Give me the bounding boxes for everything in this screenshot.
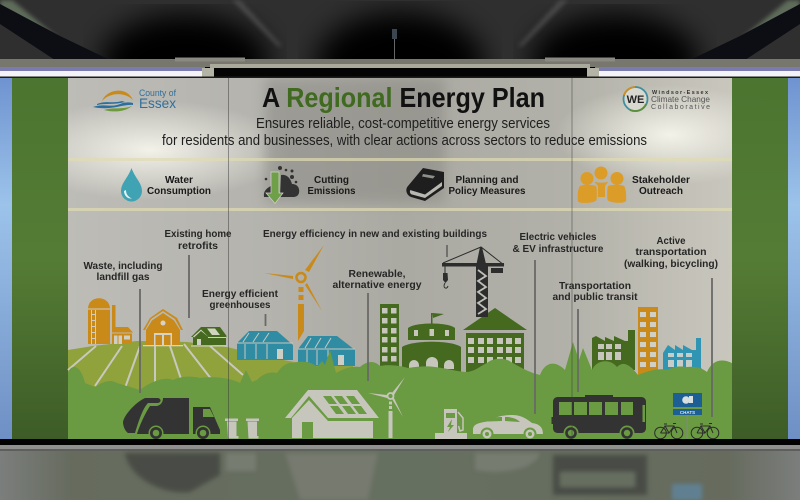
label: active transportation	[624, 235, 718, 270]
icon: silo and shed	[88, 298, 133, 344]
heading: cutting emissions	[308, 174, 356, 197]
icon: EV charging station	[435, 409, 467, 439]
label: waste: Waste, including	[84, 260, 162, 272]
label: existing home retrofits: retrofits	[178, 240, 218, 252]
logo: WE Climate Change Collaborative: Collaborative	[651, 104, 710, 111]
label: active transportation: Active	[656, 235, 686, 247]
heading: planning and policy measures: Planning and	[456, 174, 518, 186]
icon: barn	[143, 309, 183, 346]
icon: book	[406, 168, 444, 201]
floor with reflection	[0, 439, 800, 500]
icon: bins	[225, 418, 259, 438]
label: renewable energy: Renewable,	[348, 268, 406, 280]
title: A Regional Energy Plan	[262, 82, 545, 113]
subtitle: for residents and businesses, with clear actions across sectors to reduce emissions	[162, 132, 647, 149]
logo: WE Climate Change Collaborative: Windsor-Essex	[652, 90, 709, 96]
label: transportation and transit: Transportation	[559, 280, 631, 292]
heading: water consumption: Consumption	[147, 185, 211, 197]
icon: small solar house	[191, 327, 227, 346]
label: existing home retrofits: Existing home	[164, 228, 232, 240]
heading: cutting emissions: Emissions	[308, 185, 356, 197]
label: waste: landfill gas	[96, 271, 150, 283]
icon: teal factory	[663, 338, 705, 372]
heading: water consumption: Water	[165, 174, 193, 186]
heading: water consumption	[147, 174, 211, 197]
label: active transportation: (walking, bicycling)	[624, 258, 718, 270]
logo: County of Essex: County of	[139, 88, 176, 98]
heading: stakeholder outreach: Stakeholder	[632, 174, 690, 186]
icon: tall green building	[380, 304, 399, 368]
logo: WE Climate Change Collaborative	[624, 87, 710, 111]
logo: WE Climate Change Collaborative: WE	[627, 94, 644, 106]
icon: rotunda building	[402, 313, 461, 372]
icon: green factory	[592, 330, 635, 370]
icon: bus	[552, 395, 646, 440]
icon: garbage truck	[123, 398, 220, 440]
logo: County of Essex: Essex	[139, 95, 176, 111]
icon: bicycles	[655, 424, 719, 439]
label: energy efficient greenhouses: Energy efficient	[202, 288, 278, 300]
icon: solar house	[285, 390, 379, 438]
icon: CHATS sign	[673, 393, 702, 439]
label: energy efficient greenhouses	[202, 288, 278, 311]
icon: small wind turbine	[368, 377, 405, 438]
label: waste	[84, 260, 162, 283]
icon: CHATS sign: CHATS	[680, 410, 695, 415]
label: transportation and transit	[552, 280, 638, 303]
label: electric vehicles	[512, 231, 604, 255]
label: electric vehicles: & EV infrastructure	[512, 243, 604, 255]
heading: planning and policy measures: Policy Measures	[448, 185, 526, 197]
heading: cutting emissions: Cutting	[314, 174, 349, 186]
olive farm field	[68, 341, 353, 400]
side panel: left blue	[0, 78, 12, 440]
icon: large wind turbine	[264, 245, 324, 341]
ceiling light rail	[0, 58, 800, 78]
icon: orange tower	[638, 307, 658, 375]
green hills and trees	[68, 342, 732, 439]
label: existing home retrofits	[164, 228, 232, 252]
ceiling	[0, 0, 800, 59]
heading: planning and policy measures	[448, 174, 526, 197]
panel: main mural	[67, 78, 732, 439]
icon: stakeholder people	[578, 166, 626, 203]
label: energy efficiency in buildings: Energy efficiency in new and existing buildings	[263, 228, 487, 240]
label: renewable energy	[332, 268, 422, 291]
label: electric vehicles: Electric vehicles	[520, 231, 597, 243]
side panel: left green	[12, 78, 68, 440]
subtitle	[162, 115, 647, 149]
heading: stakeholder outreach	[632, 174, 690, 197]
side panel: right blue	[788, 78, 800, 440]
heading: stakeholder outreach: Outreach	[639, 185, 683, 197]
icon: greenhouses	[237, 331, 355, 366]
logo: WE Climate Change Collaborative: Climate Change	[651, 94, 710, 104]
side panel: right green	[732, 78, 788, 440]
label: energy efficient greenhouses: greenhouses	[210, 299, 271, 311]
icon: green hall building	[463, 308, 527, 375]
label: active transportation: transportation	[636, 246, 706, 258]
icon: cutting emissions	[264, 166, 299, 204]
label: renewable energy: alternative energy	[332, 279, 422, 291]
logo: County of Essex	[93, 88, 176, 111]
leader lines	[140, 245, 712, 417]
subtitle: Ensures reliable, cost-competitive energy services	[256, 115, 550, 132]
label: transportation and transit: and public transit	[552, 291, 638, 303]
icon: water drop	[121, 168, 142, 202]
icon: construction crane	[442, 247, 504, 317]
icon: electric car	[473, 415, 543, 440]
